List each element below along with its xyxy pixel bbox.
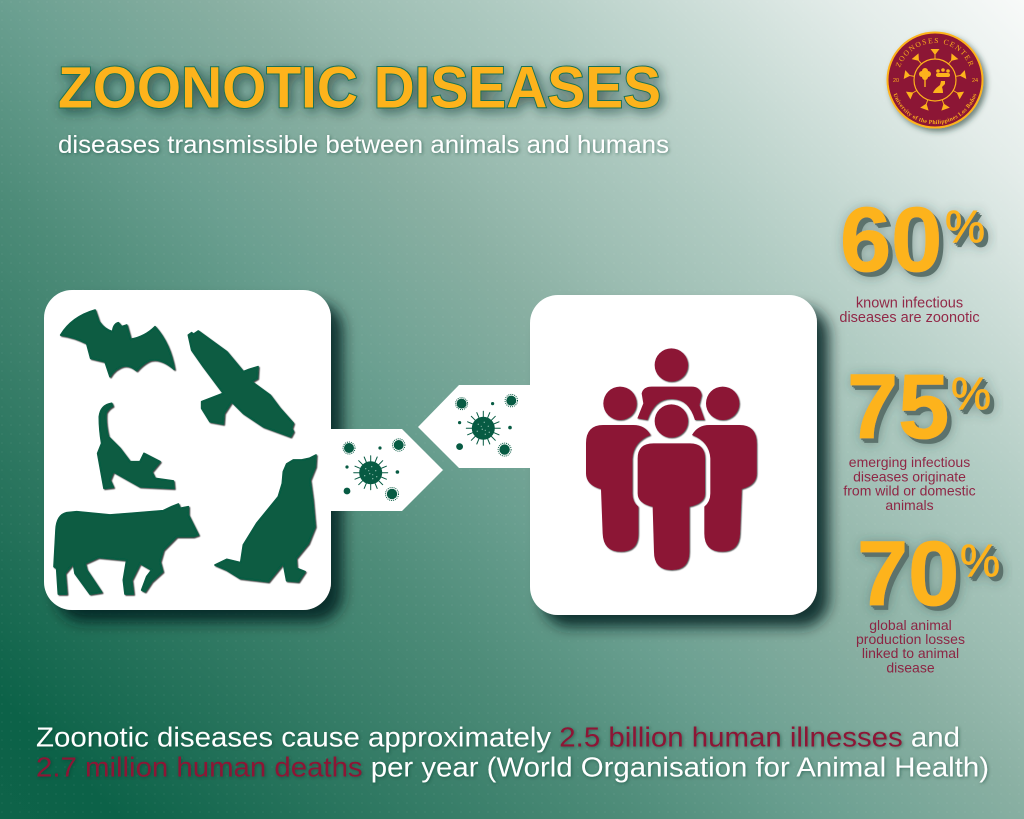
description: disease	[886, 660, 935, 676]
logo: Zoonoses Center seal: 20	[893, 78, 899, 84]
description: known infectious	[856, 296, 963, 312]
description: animals	[885, 497, 934, 513]
icon: cat	[98, 403, 174, 488]
logo: Zoonoses Center seal	[886, 30, 991, 136]
description: production losses	[856, 631, 965, 647]
description: global animal	[869, 617, 952, 633]
arrow: from animals to humans	[325, 429, 443, 511]
description: emerging infectious	[849, 454, 970, 470]
description: from wild or domestic	[843, 482, 976, 498]
panel card	[530, 295, 817, 615]
subtitle: diseases transmissible between animals and humans	[58, 131, 669, 159]
icon: bat	[61, 310, 174, 377]
arrow shape	[418, 385, 535, 468]
logo: Zoonoses Center seal: ZOONOSES CENTER	[896, 38, 974, 68]
icon: virus cluster	[343, 439, 405, 500]
panel card	[44, 290, 331, 610]
description: diseases are zoonotic	[839, 310, 980, 326]
arrow shape	[325, 429, 443, 511]
panel: humans	[530, 295, 817, 615]
description: linked to animal	[862, 645, 959, 661]
percent sign: %	[951, 368, 991, 419]
number: 60	[840, 189, 942, 291]
arrow: from humans to animals	[418, 385, 535, 468]
icon: group of people	[586, 348, 757, 570]
percent sign: %	[945, 201, 985, 252]
stat: 60%	[839, 189, 985, 326]
footer line 1: Zoonotic diseases cause approximately 2.5 billion human illnesses and	[36, 722, 960, 752]
stat: 75%	[843, 356, 991, 513]
stat: 70%	[856, 523, 1000, 676]
title: ZOONOTIC DISEASES	[58, 56, 661, 120]
description: diseases originate	[853, 468, 966, 484]
panel: animals	[44, 290, 331, 610]
logo: Zoonoses Center seal: University of the Philippines Los Baños	[894, 92, 976, 125]
footer statement	[36, 722, 989, 782]
number: 70	[857, 523, 959, 625]
icon: cow	[54, 504, 198, 594]
icon: bird of prey	[188, 331, 293, 437]
logo: Zoonoses Center seal: 24	[972, 78, 978, 84]
percent sign: %	[960, 535, 1000, 586]
footer line 2: 2.7 million human deaths per year (World Organisation for Animal Health)	[36, 752, 989, 782]
icon: virus cluster	[456, 394, 518, 456]
icon: dog	[215, 455, 316, 582]
number: 75	[847, 356, 949, 458]
